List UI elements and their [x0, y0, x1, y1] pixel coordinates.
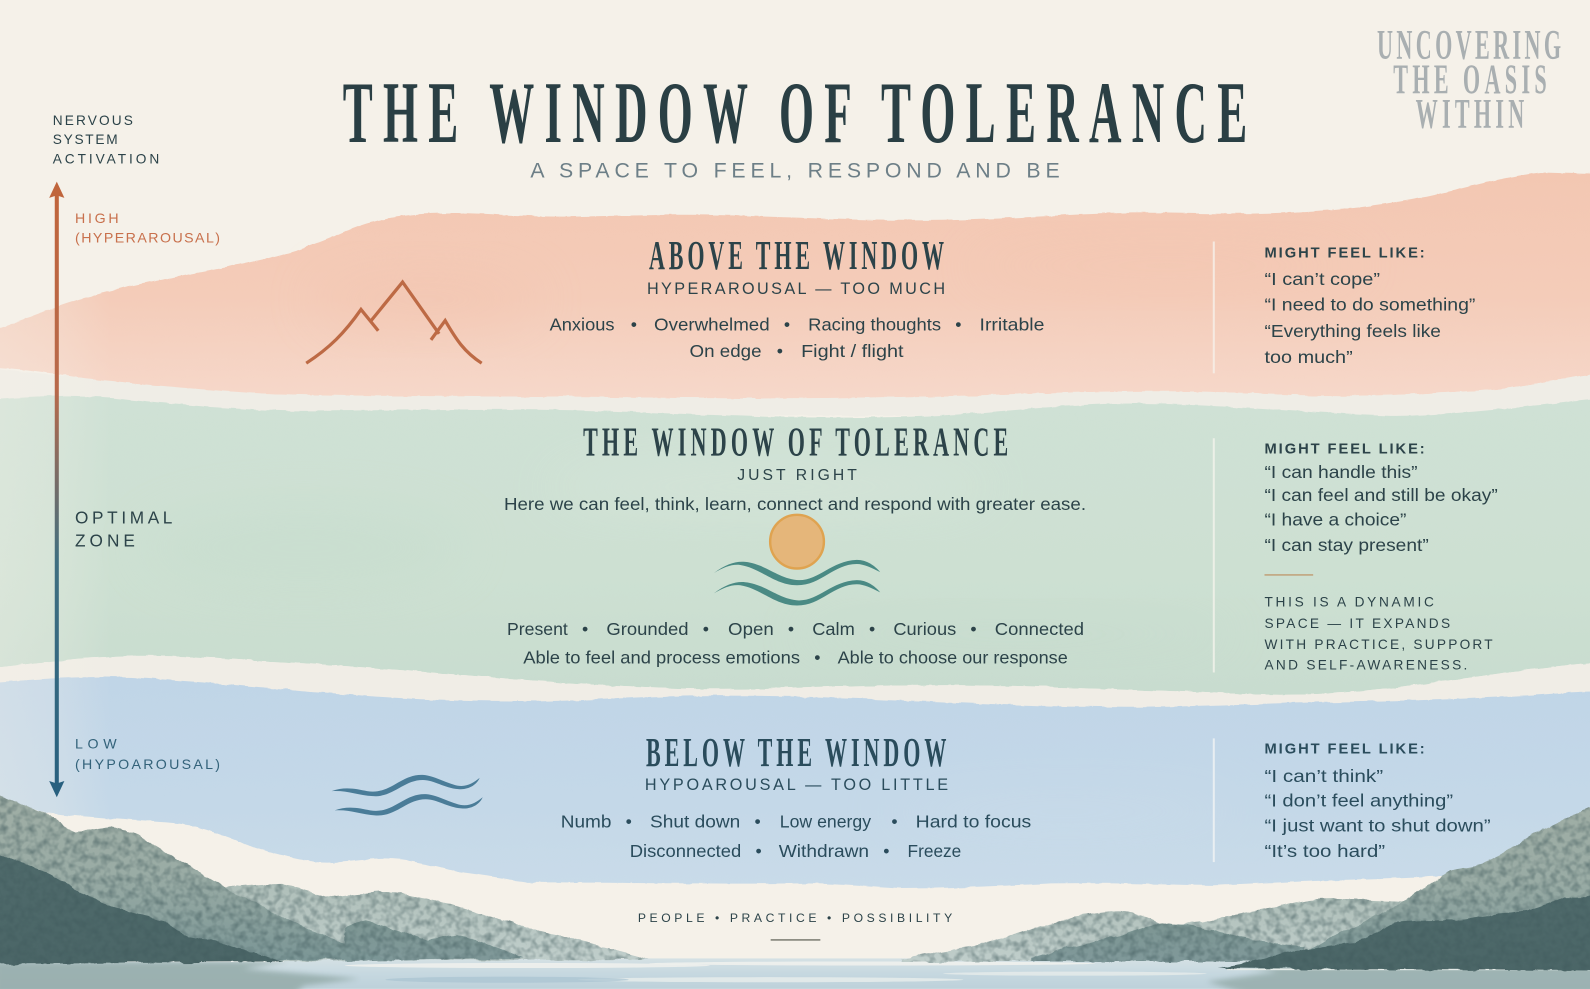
subtitle: A SPACE TO FEEL, RESPOND AND BE [530, 159, 1060, 183]
large mountain left [0, 786, 385, 961]
mid hills right [1031, 922, 1304, 961]
traits list: Curious [893, 619, 956, 639]
feelings list: Overwhelmed [654, 315, 770, 335]
dynamic space note: SPACE — IT EXPANDS [1264, 616, 1450, 631]
feelings list: Anxious [550, 315, 615, 335]
symptoms list: Withdrawn [779, 841, 869, 861]
dark foreground right [1218, 895, 1590, 971]
feelings list [550, 315, 1045, 361]
quotes [1264, 269, 1476, 367]
dynamic space note: AND SELF-AWARENESS. [1264, 657, 1467, 672]
symptoms list: Numb [561, 812, 612, 832]
traits list: • [582, 619, 588, 639]
brand mark [1377, 23, 1561, 138]
axis label: optimal zone: OPTIMAL [75, 507, 172, 527]
quotes [1264, 462, 1498, 555]
feelings list: • [955, 315, 961, 335]
footer tagline: PEOPLE • PRACTICE • POSSIBILITY [638, 911, 952, 925]
quotes: “I don’t feel anything” [1264, 790, 1453, 810]
subheading: JUST RIGHT [737, 467, 857, 484]
axis label: low: LOW [75, 737, 117, 753]
feelings list: Racing thoughts [808, 315, 941, 335]
quotes: “I can feel and still be okay” [1264, 485, 1498, 505]
panel: window of tolerance watercolour band [0, 367, 1590, 695]
axis title: nervous system activation: ACTIVATION [53, 151, 159, 166]
feelings list: • [777, 341, 783, 361]
panel: might feel like, above [1213, 241, 1476, 373]
icon: water waves [714, 560, 880, 606]
dynamic space note [1264, 595, 1493, 672]
quotes [1264, 766, 1491, 861]
symptoms list: • [755, 841, 762, 861]
traits list [507, 619, 1084, 667]
traits list: Grounded [606, 619, 689, 639]
footer rule [771, 939, 820, 941]
symptoms list: Freeze [908, 841, 961, 861]
traits list: Able to choose our response [838, 647, 1068, 667]
distant hills right [900, 899, 1420, 961]
panel: hyperarousal watercolour band [0, 173, 1590, 399]
dynamic space note: THIS IS A DYNAMIC [1264, 595, 1434, 610]
quotes: “Everything feels like [1264, 321, 1441, 341]
section: above the window text [550, 233, 1045, 361]
brand mark: THE OASIS [1393, 57, 1547, 103]
icon: sun [770, 515, 824, 569]
quotes: “I have a choice” [1264, 509, 1407, 529]
brand mark: UNCOVERING [1377, 23, 1561, 69]
symptoms list [561, 812, 1031, 861]
axis label: low [75, 737, 220, 773]
symptoms list: • [754, 812, 761, 832]
heading: THE WINDOW OF TOLERANCE [583, 419, 1008, 465]
traits list: • [703, 619, 709, 639]
feelings list: Irritable [980, 315, 1045, 335]
axis label: high: HIGH [75, 211, 119, 227]
large mountain right [1288, 797, 1590, 961]
quotes: “I need to do something” [1264, 294, 1476, 314]
axis label: high: (HYPERAROUSAL) [75, 231, 220, 247]
traits list: Connected [995, 619, 1084, 639]
dark foreground left [0, 855, 284, 963]
feelings list: Fight / flight [801, 341, 904, 361]
axis title: nervous system activation: SYSTEM [53, 132, 118, 147]
icon: mountains [306, 282, 482, 363]
traits list: • [970, 619, 977, 639]
subheading: HYPOAROUSAL — TOO LITTLE [645, 776, 948, 794]
axis title: nervous system activation [53, 113, 159, 166]
axis label: optimal zone: ZONE [75, 531, 135, 551]
traits list: Able to feel and process emotions [523, 647, 800, 667]
panel: hypoarousal watercolour band [0, 656, 1590, 888]
symptoms list: Shut down [650, 812, 740, 832]
traits list: • [814, 647, 820, 667]
quotes: too much” [1264, 347, 1353, 367]
landscape: mountains and lake [0, 786, 1590, 989]
traits list: Calm [812, 619, 855, 639]
label: MIGHT FEEL LIKE: [1264, 742, 1425, 758]
brand mark: WITHIN [1416, 92, 1525, 138]
axis label: optimal zone [75, 507, 172, 551]
symptoms list: Low energy [780, 812, 871, 832]
feelings list: On edge [690, 341, 762, 361]
symptoms list: • [891, 812, 898, 832]
description: Here we can feel, think, learn, connect and respond with greater ease. [504, 494, 1086, 514]
dynamic space note: WITH PRACTICE, SUPPORT [1264, 637, 1493, 652]
axis label: low: (HYPOAROUSAL) [75, 757, 220, 773]
subheading: HYPERAROUSAL — TOO MUCH [647, 280, 945, 298]
left edge fade over bands [0, 173, 1590, 822]
quotes: “It’s too hard” [1264, 841, 1385, 861]
traits list: Open [728, 619, 774, 639]
title: THE WINDOW OF TOLERANCE [343, 65, 1247, 162]
mid hills left [345, 922, 525, 961]
quotes: “I just want to shut down” [1264, 816, 1491, 836]
feelings list: • [631, 315, 637, 335]
label: MIGHT FEEL LIKE: [1264, 441, 1425, 457]
axis label: high [75, 211, 220, 247]
icon: low waves [332, 775, 483, 815]
traits list: • [869, 619, 875, 639]
section: below the window text [561, 730, 1031, 861]
quotes: “I can’t think” [1264, 766, 1383, 786]
symptoms list: Disconnected [630, 841, 741, 861]
feelings list: • [784, 315, 790, 335]
panel: might feel like, below [1213, 738, 1491, 862]
lake [0, 958, 1590, 989]
quotes: “I can’t cope” [1264, 269, 1380, 289]
symptoms list: Hard to focus [916, 812, 1031, 832]
heading: ABOVE THE WINDOW [649, 233, 944, 279]
heading: BELOW THE WINDOW [646, 730, 946, 776]
distant hills left [208, 883, 649, 961]
vertical activation arrow [49, 182, 64, 797]
panel: might feel like, window [1213, 438, 1498, 672]
symptoms list: • [883, 841, 889, 861]
axis title: nervous system activation: NERVOUS [53, 113, 133, 128]
label: MIGHT FEEL LIKE: [1264, 246, 1425, 262]
quotes: “I can handle this” [1264, 462, 1418, 482]
section: window of tolerance text [504, 419, 1086, 667]
traits list: • [788, 619, 794, 639]
symptoms list: • [626, 812, 632, 832]
quotes: “I can stay present” [1264, 535, 1429, 555]
traits list: Present [507, 619, 568, 639]
